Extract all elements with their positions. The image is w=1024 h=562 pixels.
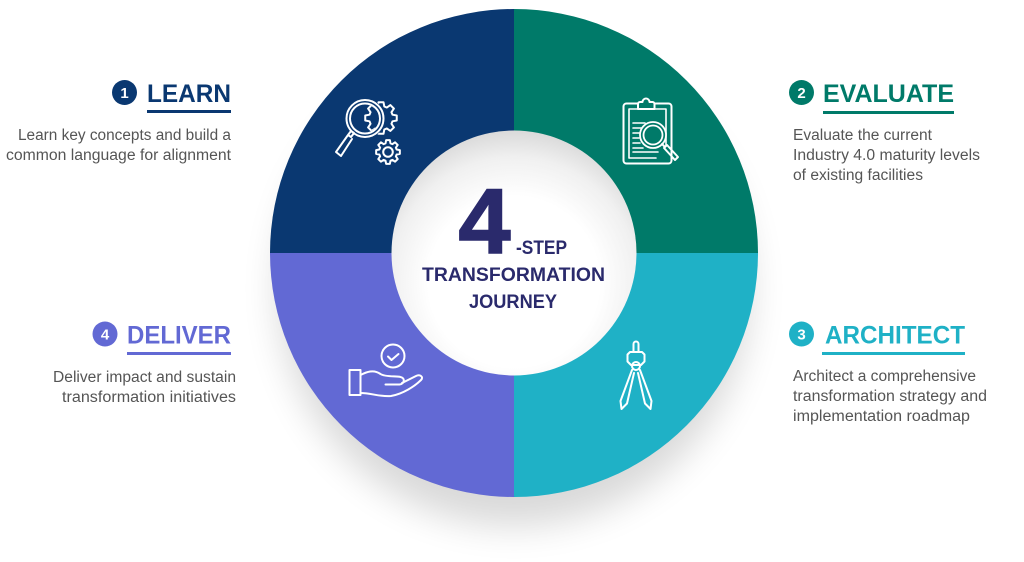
architect description: transformation strategy and <box>793 388 987 405</box>
deliver description <box>53 369 236 406</box>
panel: architect <box>789 322 987 425</box>
badge 1 <box>112 80 137 105</box>
heading architect: ARCHITECT <box>825 322 965 350</box>
segment: evaluate <box>514 9 758 253</box>
center circle <box>392 130 636 376</box>
heading deliver: DELIVER <box>127 322 231 350</box>
panel: evaluate <box>789 80 980 184</box>
badge 2: 2 <box>797 85 806 102</box>
badge 1: 1 <box>120 85 129 102</box>
underline <box>127 352 231 355</box>
underline <box>147 110 231 113</box>
deliver description: transformation initiatives <box>62 389 236 406</box>
donut chart <box>270 9 758 497</box>
icon: magnifier with gears <box>336 100 400 164</box>
badge 2 <box>789 80 814 105</box>
deliver description: Deliver impact and sustain <box>53 369 236 386</box>
ring drop shadow <box>278 50 750 526</box>
badge 4 <box>92 322 118 346</box>
journey label: JOURNEY <box>469 292 557 313</box>
step label: -STEP <box>516 238 567 259</box>
underline <box>822 352 965 355</box>
badge 4: 4 <box>101 326 110 344</box>
learn description: Learn key concepts and build a <box>18 127 231 144</box>
transformation label: TRANSFORMATION <box>422 265 605 286</box>
architect description <box>793 368 987 425</box>
badge 3 <box>789 322 814 346</box>
heading learn: LEARN <box>147 80 231 108</box>
segment: learn <box>270 9 514 253</box>
underline <box>823 111 954 114</box>
learn description <box>6 127 232 164</box>
learn description: common language for alignment <box>6 147 232 164</box>
segment: architect <box>514 253 758 497</box>
evaluate description: Evaluate the current <box>793 127 933 144</box>
segment: deliver <box>270 253 514 497</box>
evaluate description: of existing facilities <box>793 167 923 184</box>
architect description: implementation roadmap <box>793 408 970 425</box>
heading evaluate: EVALUATE <box>823 80 954 108</box>
icon: drafting compass <box>620 342 652 409</box>
icon: hand with check <box>350 344 422 396</box>
evaluate description: Industry 4.0 maturity levels <box>793 147 980 164</box>
evaluate description <box>793 127 980 184</box>
badge 3: 3 <box>797 326 806 344</box>
big numeral 4: 4 <box>458 171 510 273</box>
icon: clipboard with magnifier <box>624 99 678 164</box>
architect description: Architect a comprehensive <box>793 368 976 385</box>
center title <box>422 171 605 313</box>
panel: learn <box>6 80 232 164</box>
panel: deliver <box>53 322 236 406</box>
